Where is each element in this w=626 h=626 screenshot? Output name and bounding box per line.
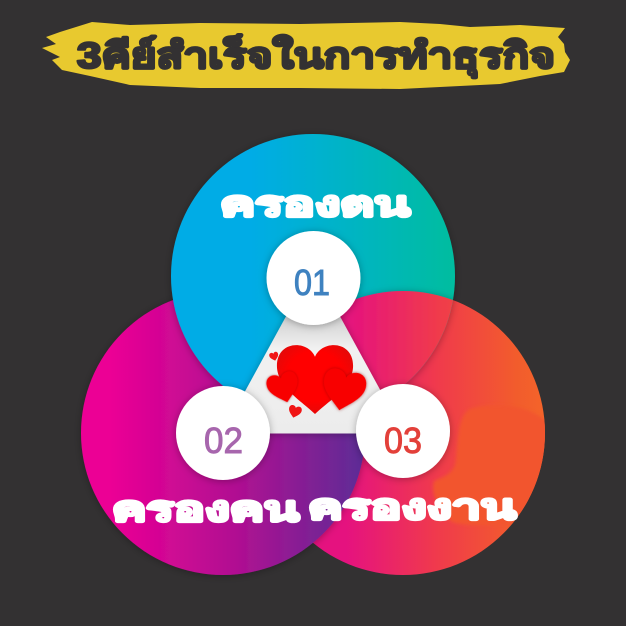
label: ครองงาน: ครองงาน xyxy=(308,488,516,527)
circle 02: ครองคน xyxy=(81,291,365,575)
circle 03: ครองงาน xyxy=(261,291,545,575)
circle 01: ครองตน xyxy=(171,134,455,418)
centre triangle xyxy=(222,267,404,434)
big heart xyxy=(277,345,353,414)
title text: 3คีย์สำเร็จในการทำธุรกิจ xyxy=(77,33,555,79)
badge 02: 02 xyxy=(204,420,243,461)
orange blob in circle 03 xyxy=(433,405,550,525)
brush stroke xyxy=(42,22,570,89)
circle 03 overlap over circle 01 xyxy=(340,288,453,390)
badge 01: 01 xyxy=(294,262,330,303)
badge 01 xyxy=(266,231,360,325)
label: ครองตน: ครองตน xyxy=(220,185,410,224)
badge 03: 03 xyxy=(384,420,422,461)
icon: hearts xyxy=(265,345,368,419)
title banner xyxy=(42,22,570,89)
badge 03 xyxy=(356,384,450,478)
venn diagram xyxy=(81,134,550,575)
right heart xyxy=(318,366,368,415)
badge 02 xyxy=(176,386,270,480)
label: ครองคน: ครองคน xyxy=(112,490,299,529)
small heart bottom xyxy=(287,404,303,419)
small heart top xyxy=(269,351,280,362)
left heart xyxy=(265,369,302,406)
